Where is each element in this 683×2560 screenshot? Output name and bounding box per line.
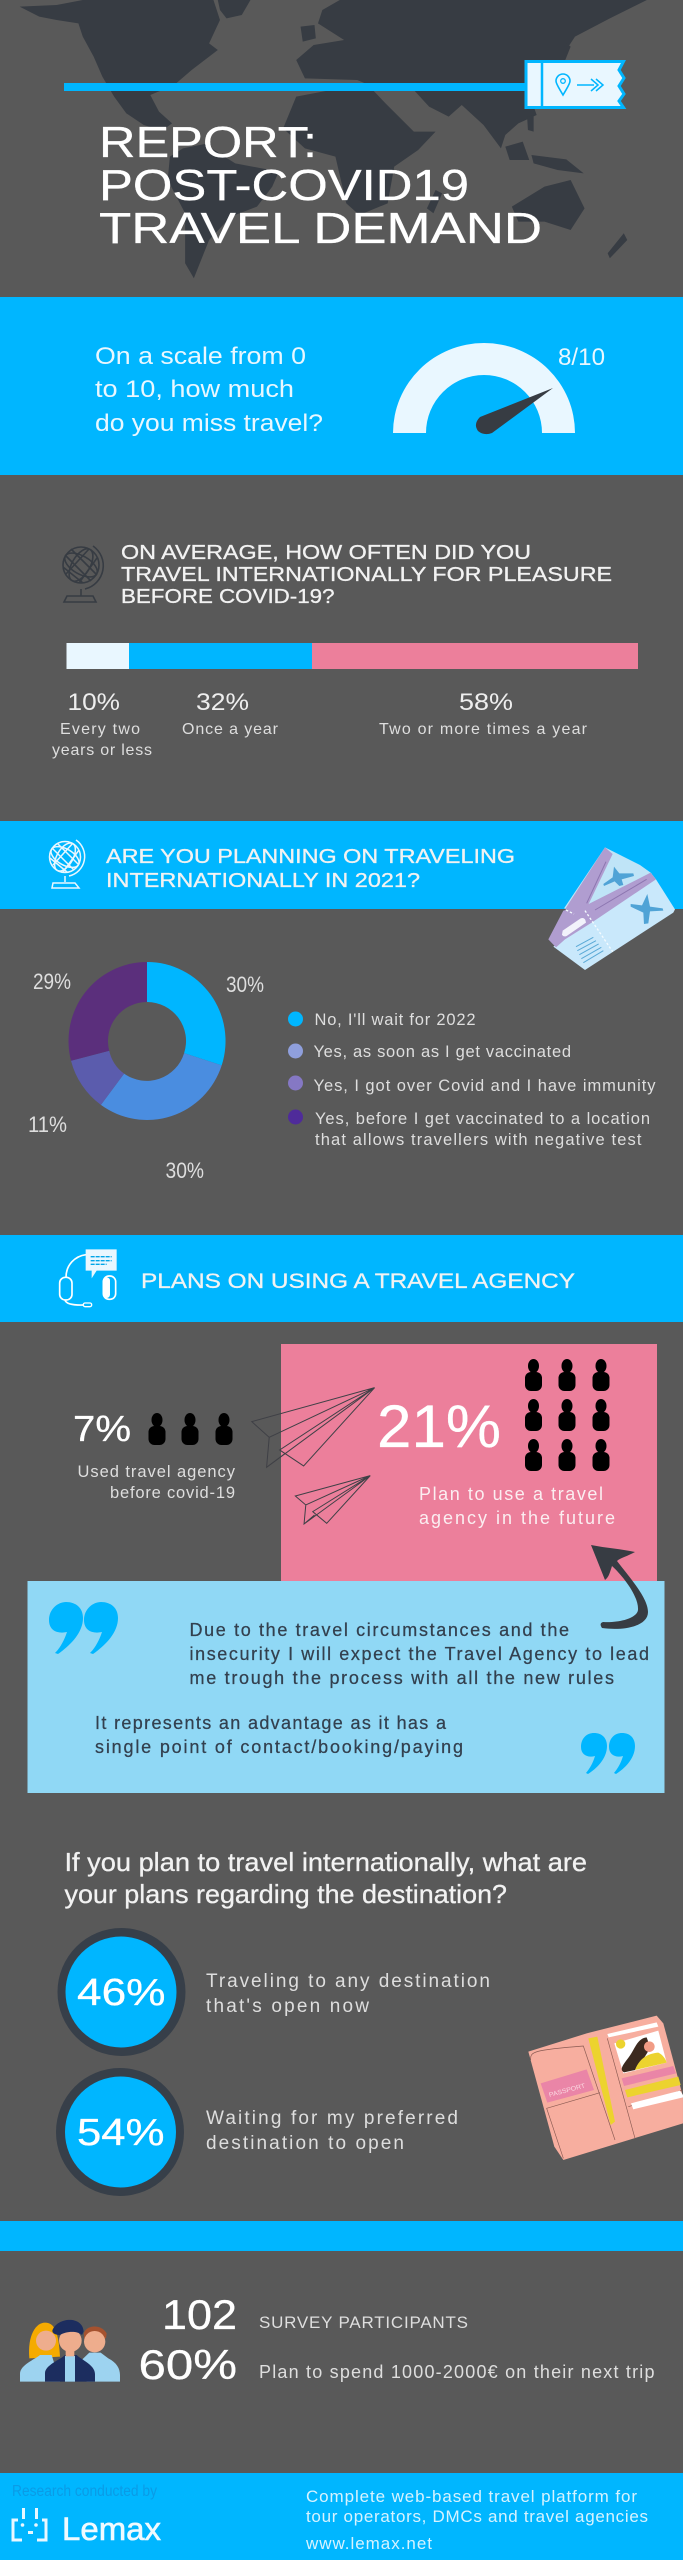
bar labels: Two or more times a year — [379, 721, 588, 738]
caption: any destination: that's open now — [206, 1996, 369, 2017]
bar labels: 58% — [459, 689, 513, 716]
stat circle: 46 percent — [58, 1928, 186, 2056]
quote text: single point of contact/booking/paying — [95, 1737, 463, 1757]
stat circle: 54 percent — [56, 2068, 184, 2196]
panel: quote — [28, 1581, 664, 1793]
gauge — [393, 343, 575, 434]
panel: destination plans — [56, 1847, 587, 2196]
donut labels: 30% — [226, 972, 264, 997]
stacked bar chart — [66, 643, 638, 669]
quote text: It represents an advantage as it has a — [95, 1713, 447, 1733]
donut labels: 30% — [166, 1158, 204, 1183]
102 stat: 102 — [162, 2291, 237, 2338]
bar labels: 32% — [196, 689, 249, 716]
stat circle: 54 percent: 54% — [77, 2112, 164, 2154]
icon: white globe — [48, 840, 85, 888]
icon: passport wallet: PASSPORT — [548, 2083, 586, 2099]
icon: three people — [148, 1413, 232, 1445]
icon: dark globe — [61, 545, 103, 602]
agency heading: PLANS ON USING A TRAVEL AGENCY — [141, 1270, 575, 1293]
scale question text: do you miss travel? — [95, 410, 323, 437]
bar labels: Every two — [60, 721, 140, 738]
planning heading: INTERNATIONALLY IN 2021? — [106, 870, 420, 892]
scale question text: to 10, how much — [95, 376, 294, 403]
caption: preferred destination — [206, 2108, 458, 2154]
title — [99, 118, 542, 253]
quote text: insecurity I will expect the Travel Agency to lead — [190, 1644, 649, 1664]
decorative blue strip — [0, 2221, 683, 2251]
donut labels: 29% — [33, 969, 71, 994]
bar labels: Once a year — [182, 721, 279, 738]
donut labels: 11% — [28, 1112, 67, 1137]
frequency heading: ON AVERAGE, HOW OFTEN DID YOU — [121, 542, 531, 564]
future agency caption: agency in the future — [419, 1508, 615, 1528]
icon: ticket with pin and arrow — [526, 61, 624, 108]
bar labels — [52, 689, 588, 759]
icon: paper planes — [252, 1388, 375, 1524]
donut labels — [28, 969, 264, 1183]
donut legend: that allows travellers with negative test — [315, 1131, 642, 1149]
panel: miss travel scale — [0, 297, 683, 475]
planning heading — [106, 846, 515, 892]
quote text: me trough the process with all the new rules — [190, 1668, 614, 1688]
arrow — [591, 1545, 648, 1629]
company description: www.lemax.net — [305, 2534, 432, 2553]
panel: travel frequency — [52, 542, 638, 759]
caption: preferred destination: destination to open — [206, 2133, 404, 2154]
frequency heading: TRAVEL INTERNATIONALLY FOR PLEASURE — [121, 564, 612, 586]
icon: plane tickets — [548, 847, 675, 970]
company description: Complete web-based travel platform for — [306, 2487, 637, 2506]
Lemax logo: Lemax — [62, 2511, 161, 2547]
icon: passport wallet — [528, 2016, 683, 2160]
icon: group of people — [20, 2320, 120, 2382]
destination heading: If you plan to travel internationally, what are — [64, 1847, 587, 1877]
quote text: Due to the travel circumstances and the — [190, 1620, 569, 1640]
panel: travel agency heading band — [0, 1235, 683, 1322]
scale question text — [95, 343, 323, 437]
7 percent stat — [73, 1408, 236, 1502]
prior agency caption: before covid-19 — [110, 1484, 235, 1502]
caption: any destination: Traveling to any destination — [206, 1971, 490, 1992]
caption: preferred destination: Waiting for my preferred — [206, 2108, 458, 2129]
company description: tour operators, DMCs and travel agencies — [306, 2507, 648, 2526]
quote text — [95, 1620, 649, 1757]
title: POST-COVID19 — [99, 161, 469, 210]
future agency caption — [419, 1484, 615, 1528]
world map background — [20, 0, 647, 278]
future agency caption: Plan to use a travel — [419, 1484, 603, 1504]
gauge value: 8/10 — [558, 344, 605, 371]
21 percent stat: 21% — [377, 1393, 501, 1460]
research credit: Research conducted by — [12, 2483, 157, 2500]
title: TRAVEL DEMAND — [99, 204, 542, 253]
bar labels: years or less — [52, 742, 152, 759]
footer panel — [0, 2473, 683, 2560]
prior agency caption: Used travel agency — [78, 1463, 236, 1481]
icon: opening quote mark — [49, 1602, 118, 1654]
destination heading: your plans regarding the destination? — [64, 1879, 507, 1909]
stat circle: 46 percent: 46% — [77, 1972, 166, 2014]
60 percent stat: 60% — [138, 2341, 237, 2388]
bar labels: 10% — [68, 689, 120, 716]
donut legend: No, I'll wait for 2022 — [314, 1011, 476, 1029]
Lemax logo — [13, 2508, 161, 2547]
company description — [305, 2487, 648, 2553]
icon: closing quote mark — [581, 1733, 635, 1774]
title: REPORT: — [99, 118, 317, 167]
destination heading — [64, 1847, 587, 1909]
donut legend: Yes, as soon as I get vaccinated — [314, 1043, 571, 1061]
frequency heading: BEFORE COVID-19? — [121, 586, 334, 608]
icon: headset with speech bubble — [60, 1249, 117, 1307]
caption: any destination — [206, 1971, 490, 2017]
header panel — [0, 0, 683, 297]
route line — [64, 83, 526, 91]
donut legend: Yes, I got over Covid and I have immunity — [314, 1077, 656, 1095]
planning heading: ARE YOU PLANNING ON TRAVELING — [106, 846, 515, 868]
scale question text: On a scale from 0 — [95, 343, 306, 370]
frequency heading — [121, 542, 612, 608]
prior agency caption — [78, 1463, 236, 1502]
7 percent stat: 7% — [73, 1408, 131, 1449]
spending label: Plan to spend 1000-2000€ on their next trip — [259, 2362, 654, 2382]
icon: people grid — [525, 1359, 610, 1471]
panel: planning heading band — [0, 821, 683, 909]
donut legend — [288, 1011, 656, 1149]
donut legend: Yes, before I get vaccinated to a location — [315, 1110, 650, 1128]
pink panel: future agency use — [281, 1344, 657, 1582]
survey participants label: SURVEY PARTICIPANTS — [259, 2313, 468, 2332]
panel: survey stats — [20, 2291, 654, 2388]
donut chart — [69, 962, 226, 1120]
